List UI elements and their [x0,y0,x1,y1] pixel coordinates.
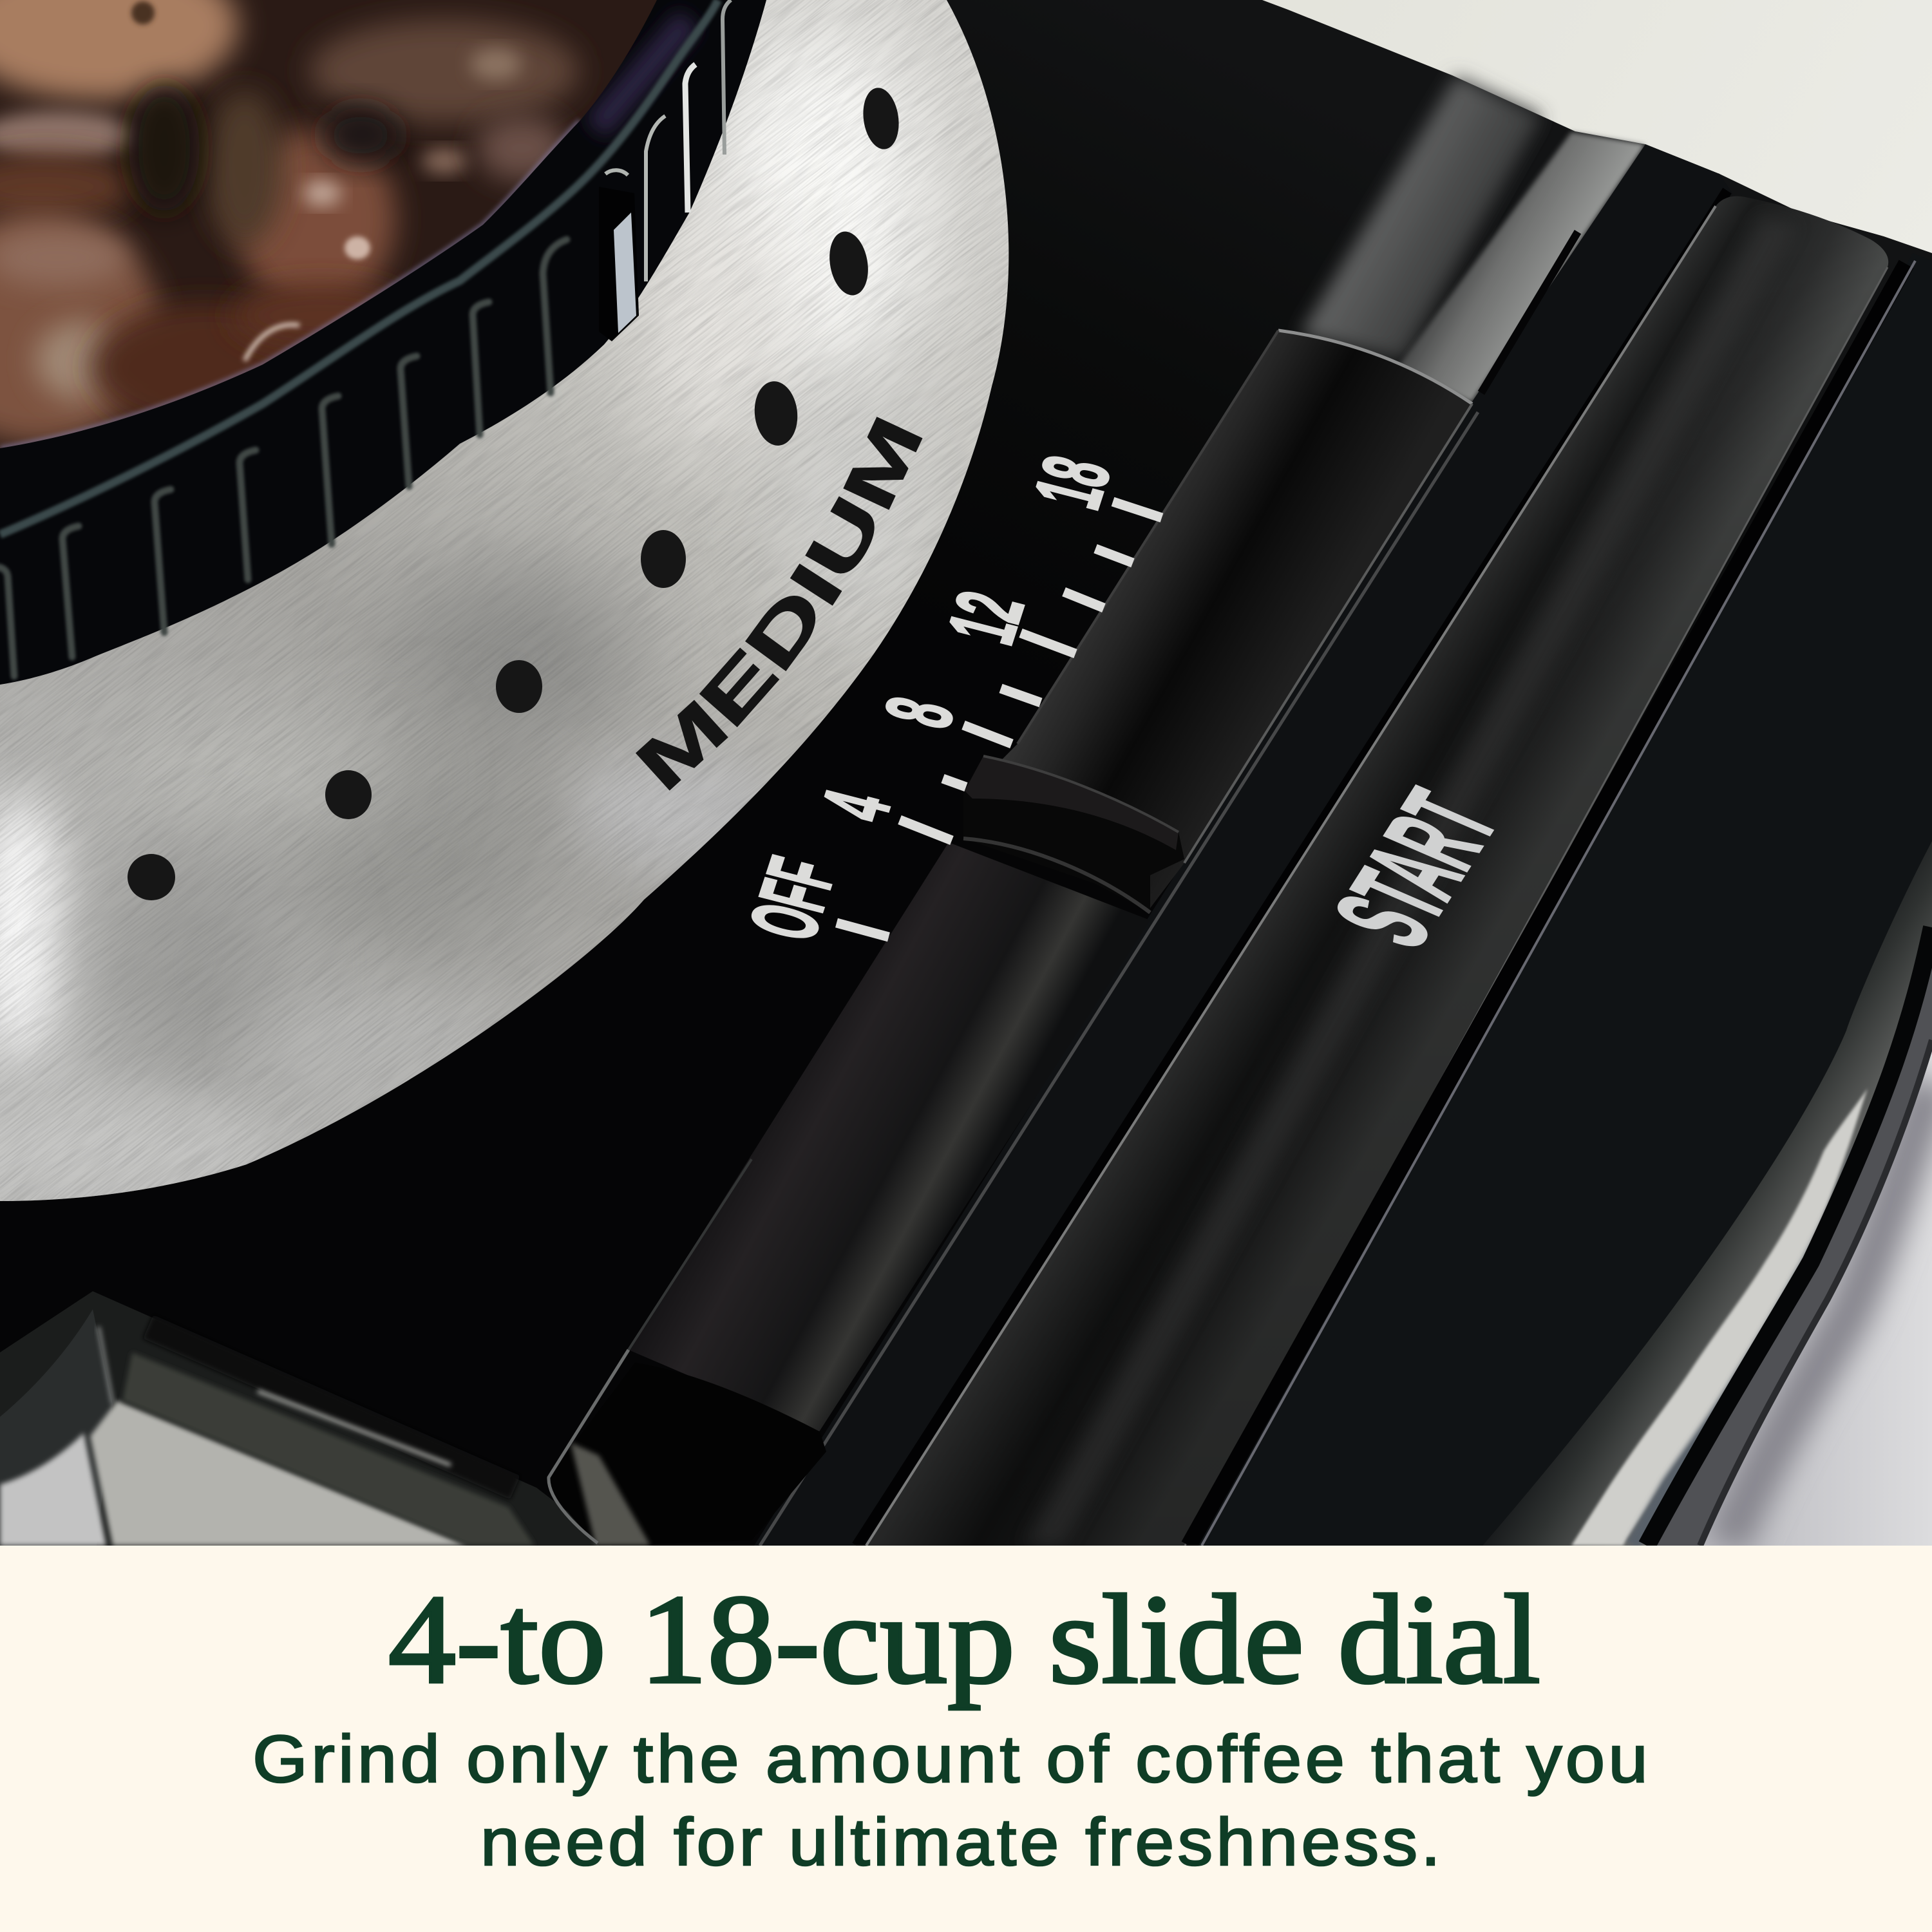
lid highlight: lighter grey band [1397,132,1645,402]
coffee beans seen through hopper [0,0,657,448]
cup scale tick marks [837,502,1162,937]
cup scale labels: 12 [929,583,1043,653]
start button bar [866,196,1888,1546]
slider lower track [629,842,1150,1432]
slider end: grey highlight and bevel lines [549,1159,752,1546]
dial setting dots [128,86,902,900]
lid highlight: upper grey band on housing [1300,75,1542,361]
right rim: grey edge, reflective strip and black ring [1482,841,1932,1546]
hopper glass purple reflection [596,19,689,129]
slider handle [963,756,1184,913]
base: stainless lower corner and bevel [0,1291,612,1546]
cup scale labels: 4 [802,782,910,830]
grinder body: black housing [0,0,1932,1546]
caption banner [0,1546,1932,1932]
dial label: MEDIUM: MEDIUM [636,417,922,791]
description text [252,1722,1651,1880]
slider end cap [549,1363,826,1546]
right panel: glossy black top [1189,253,1932,1546]
cup scale labels: 8 [866,688,973,737]
description text: Grind only the amount of coffee that you [252,1722,1651,1797]
start button label: START [1307,774,1525,963]
cup scale labels: 18 [1015,448,1130,518]
gear ring around hopper [0,0,766,685]
slider upper cover [963,330,1472,908]
stainless steel dial ring [0,0,1009,1201]
black channel beside the slider [754,144,1732,1546]
heading: 4-to 18-cup slide dial [388,1569,1540,1710]
background: countertop and wall [0,0,1932,1546]
cup scale labels: OFF [730,849,855,949]
cup scale labels [730,448,1130,949]
description text: need for ultimate freshness. [480,1805,1444,1880]
hopper glass rim [0,0,718,535]
